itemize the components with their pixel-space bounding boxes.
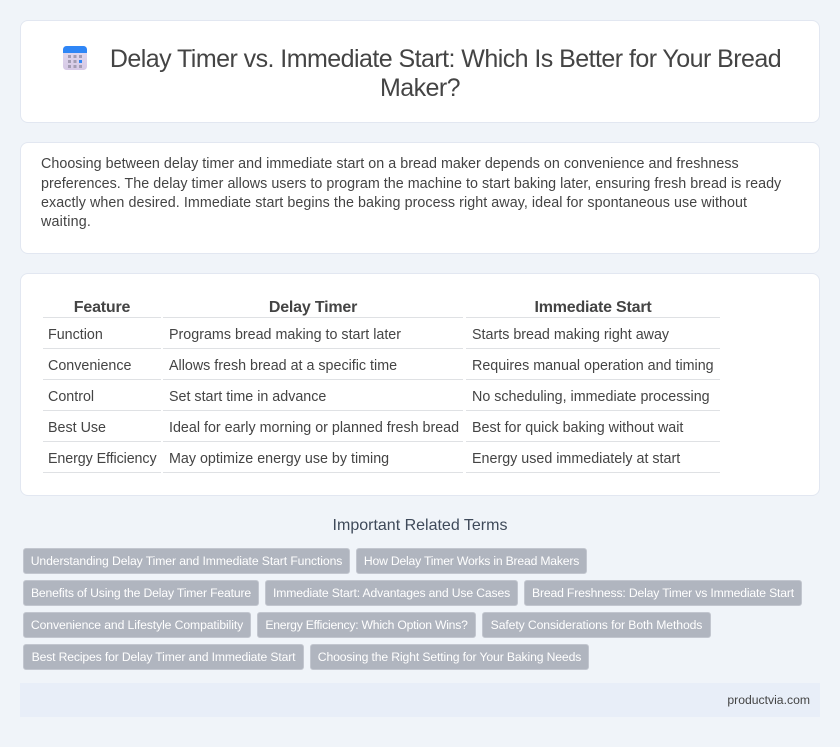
row: convenience: Allows fresh bread at a specific time xyxy=(169,358,397,374)
tag xyxy=(23,580,259,606)
table header: Delay Timer xyxy=(269,298,357,316)
tag xyxy=(257,612,476,638)
row: best use: Ideal for early morning or planned fresh bread xyxy=(169,420,459,436)
tag: Bread Freshness: Delay Timer vs Immediate Start xyxy=(532,586,794,600)
tag xyxy=(482,612,711,638)
row: energy efficiency xyxy=(48,450,680,466)
tag: Energy Efficiency: Which Option Wins? xyxy=(265,618,468,632)
tag xyxy=(524,580,802,606)
table header: Feature xyxy=(74,298,130,316)
row: convenience: Requires manual operation and timing xyxy=(472,358,714,374)
row: best use xyxy=(48,420,684,436)
row: function: Function xyxy=(48,326,103,342)
intro text: Choosing between delay timer and immediate start on a bread maker depends on convenience and freshness xyxy=(41,156,739,172)
intro text: waiting. xyxy=(41,214,91,230)
tag: Immediate Start: Advantages and Use Cases xyxy=(273,586,510,600)
tag: Safety Considerations for Both Methods xyxy=(491,618,702,632)
footer xyxy=(20,683,820,717)
tag: Best Recipes for Delay Timer and Immediate Start xyxy=(32,650,295,664)
intro text: exactly when desired. Immediate start begins the baking process right away, ideal for spontaneous use without xyxy=(41,195,747,211)
tag xyxy=(23,612,251,638)
table panel xyxy=(20,273,820,496)
table header xyxy=(74,298,652,316)
row: control xyxy=(48,388,710,404)
row: convenience xyxy=(48,358,714,374)
related terms heading: Important Related Terms xyxy=(333,517,507,534)
row: function: Starts bread making right away xyxy=(472,326,669,342)
tag: Understanding Delay Timer and Immediate Start Functions xyxy=(31,554,342,568)
icon: calendar xyxy=(63,46,87,70)
intro text: preferences. The delay timer allows users to program the machine to start baking later, ensuring fresh bread is ready xyxy=(41,176,781,192)
title: Maker? xyxy=(380,74,460,102)
title: Delay Timer vs. Immediate Start: Which Is Better for Your Bread xyxy=(110,45,781,73)
footer brand: productvia.com xyxy=(727,693,810,707)
row: function xyxy=(48,326,669,342)
table header: Immediate Start xyxy=(534,298,652,316)
related term tags xyxy=(23,548,802,670)
tag xyxy=(265,580,518,606)
tag xyxy=(23,548,350,574)
row: best use: Best Use xyxy=(48,420,106,436)
row: control: Set start time in advance xyxy=(169,388,326,404)
row: control: Control xyxy=(48,388,94,404)
row: energy efficiency: Energy used immediately at start xyxy=(472,450,680,466)
tag: Benefits of Using the Delay Timer Feature xyxy=(31,586,251,600)
row: function: Programs bread making to start later xyxy=(169,326,401,342)
tag xyxy=(356,548,587,574)
tag: Convenience and Lifestyle Compatibility xyxy=(31,618,243,632)
row: convenience: Convenience xyxy=(48,358,131,374)
intro panel xyxy=(20,142,820,254)
header card xyxy=(20,20,820,123)
row: energy efficiency: May optimize energy use by timing xyxy=(169,450,389,466)
tag xyxy=(310,644,589,670)
tag xyxy=(23,644,304,670)
title xyxy=(110,45,781,102)
tag: How Delay Timer Works in Bread Makers xyxy=(364,554,579,568)
row: best use: Best for quick baking without wait xyxy=(472,420,683,436)
tag: Choosing the Right Setting for Your Baking Needs xyxy=(318,650,581,664)
row: energy efficiency: Energy Efficiency xyxy=(48,450,156,466)
row: control: No scheduling, immediate processing xyxy=(472,388,710,404)
comparison table xyxy=(43,298,720,473)
intro text xyxy=(41,156,782,230)
